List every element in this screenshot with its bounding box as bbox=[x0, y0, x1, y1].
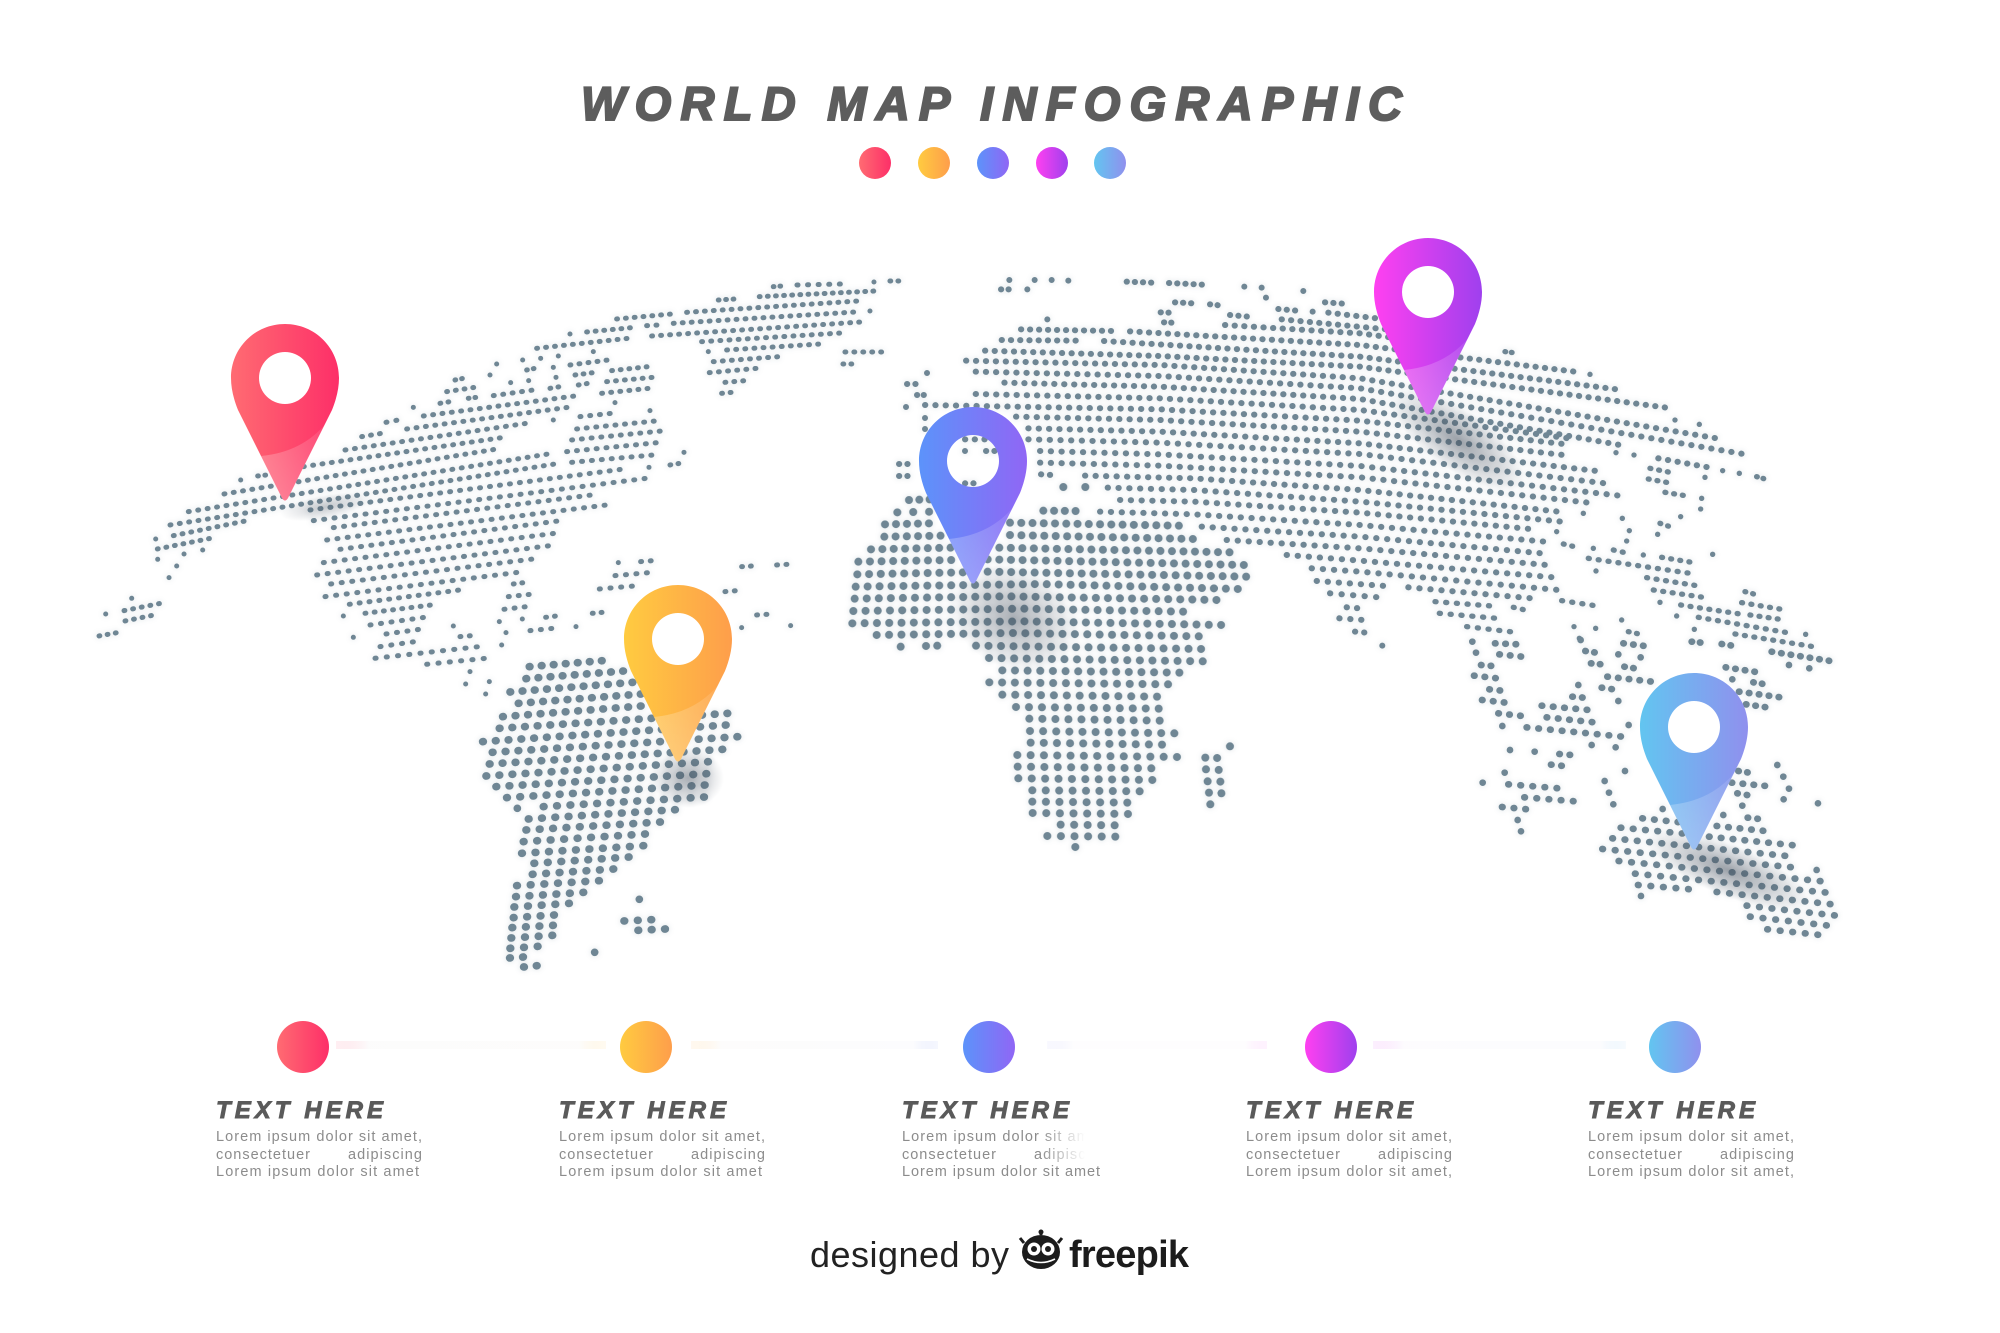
connector: first to second bbox=[336, 1041, 606, 1049]
column 2: marker and text: adipiscing bbox=[691, 1147, 765, 1163]
pin: sky blue, Australia bbox=[1640, 673, 1748, 850]
East Asia and Japan dots bbox=[1435, 352, 1813, 647]
column 1: marker and text: Lorem ipsum dolor sit amet, bbox=[216, 1129, 422, 1145]
column 1: marker and text: Lorem ipsum dolor sit amet bbox=[216, 1164, 419, 1180]
column 1: marker and text: consectetuer bbox=[216, 1147, 310, 1163]
dotted world map bbox=[99, 280, 1837, 967]
colour key dots bbox=[859, 147, 1126, 179]
column 2: marker and text: Lorem ipsum dolor sit amet, bbox=[559, 1129, 765, 1145]
column 5: marker and text bbox=[1588, 1021, 1794, 1180]
column 2: marker and text: Lorem ipsum dolor sit amet bbox=[559, 1164, 762, 1180]
pin shadow: Africa bbox=[933, 545, 1095, 691]
footer credit bbox=[810, 1230, 1190, 1276]
title: WORLD MAP INFOGRAPHIC bbox=[581, 77, 1403, 130]
South America dots bbox=[483, 661, 738, 967]
column 1: marker and text: TEXT HERE bbox=[216, 1097, 384, 1124]
column 3: marker and text: consectetuer bbox=[902, 1147, 996, 1163]
pin: orange, South America bbox=[624, 585, 732, 762]
column 4: marker and text: consectetuer bbox=[1246, 1147, 1340, 1163]
column 3: marker and text: Lorem ipsum dolor sit amet, bbox=[902, 1129, 1108, 1145]
column 3: marker and text bbox=[902, 1021, 1115, 1180]
pin shadow: North America bbox=[279, 487, 371, 527]
connector: third to fourth bbox=[1047, 1041, 1267, 1049]
pin: red, North America bbox=[231, 324, 339, 500]
column 4: marker and text bbox=[1246, 1021, 1452, 1180]
column 4: marker and text: adipiscing bbox=[1378, 1147, 1452, 1163]
North America and Greenland dots bbox=[99, 281, 900, 694]
Africa dots bbox=[852, 487, 1247, 847]
connector: fourth to fifth bbox=[1373, 1041, 1626, 1049]
connector: second to third bbox=[691, 1041, 938, 1049]
column 5: marker and text: Lorem ipsum dolor sit amet, bbox=[1588, 1164, 1794, 1180]
column 1: marker and text: adipiscing bbox=[348, 1147, 422, 1163]
pin shadow: Australia bbox=[1639, 814, 1817, 926]
column 2: marker and text: consectetuer bbox=[559, 1147, 653, 1163]
pin: magenta, Asia bbox=[1374, 238, 1482, 414]
column 1: marker and text bbox=[216, 1021, 422, 1180]
footer credit: designed by bbox=[810, 1234, 1009, 1275]
column 4: marker and text: TEXT HERE bbox=[1246, 1097, 1414, 1124]
pin: blue violet, Africa bbox=[919, 407, 1027, 584]
column 4: marker and text: Lorem ipsum dolor sit amet, bbox=[1246, 1129, 1452, 1145]
column 3: marker and text: Lorem ipsum dolor sit amet bbox=[902, 1164, 1100, 1180]
column 5: marker and text: Lorem ipsum dolor sit amet, bbox=[1588, 1129, 1794, 1145]
map dots bbox=[99, 280, 1837, 967]
map dot halo bbox=[99, 280, 1837, 967]
column 5: marker and text: consectetuer bbox=[1588, 1147, 1682, 1163]
column 2: marker and text: TEXT HERE bbox=[559, 1097, 727, 1124]
Southeast Asia and Australia dots bbox=[1472, 640, 1837, 935]
column 3: marker and text: TEXT HERE bbox=[902, 1097, 1070, 1124]
footer credit: freepik bbox=[1069, 1234, 1190, 1276]
icon: freepik mascot bbox=[1020, 1230, 1062, 1269]
pin shadow: South America bbox=[652, 748, 724, 808]
column 4: marker and text: Lorem ipsum dolor sit amet, bbox=[1246, 1164, 1452, 1180]
Eurasia dots bbox=[899, 280, 1743, 646]
column 2: marker and text bbox=[559, 1021, 765, 1180]
pin shadow: Asia bbox=[1377, 371, 1539, 509]
column 3: marker and text: adipiscing bbox=[1034, 1147, 1108, 1163]
column 5: marker and text: adipiscing bbox=[1720, 1147, 1794, 1163]
column 5: marker and text: TEXT HERE bbox=[1588, 1097, 1756, 1124]
